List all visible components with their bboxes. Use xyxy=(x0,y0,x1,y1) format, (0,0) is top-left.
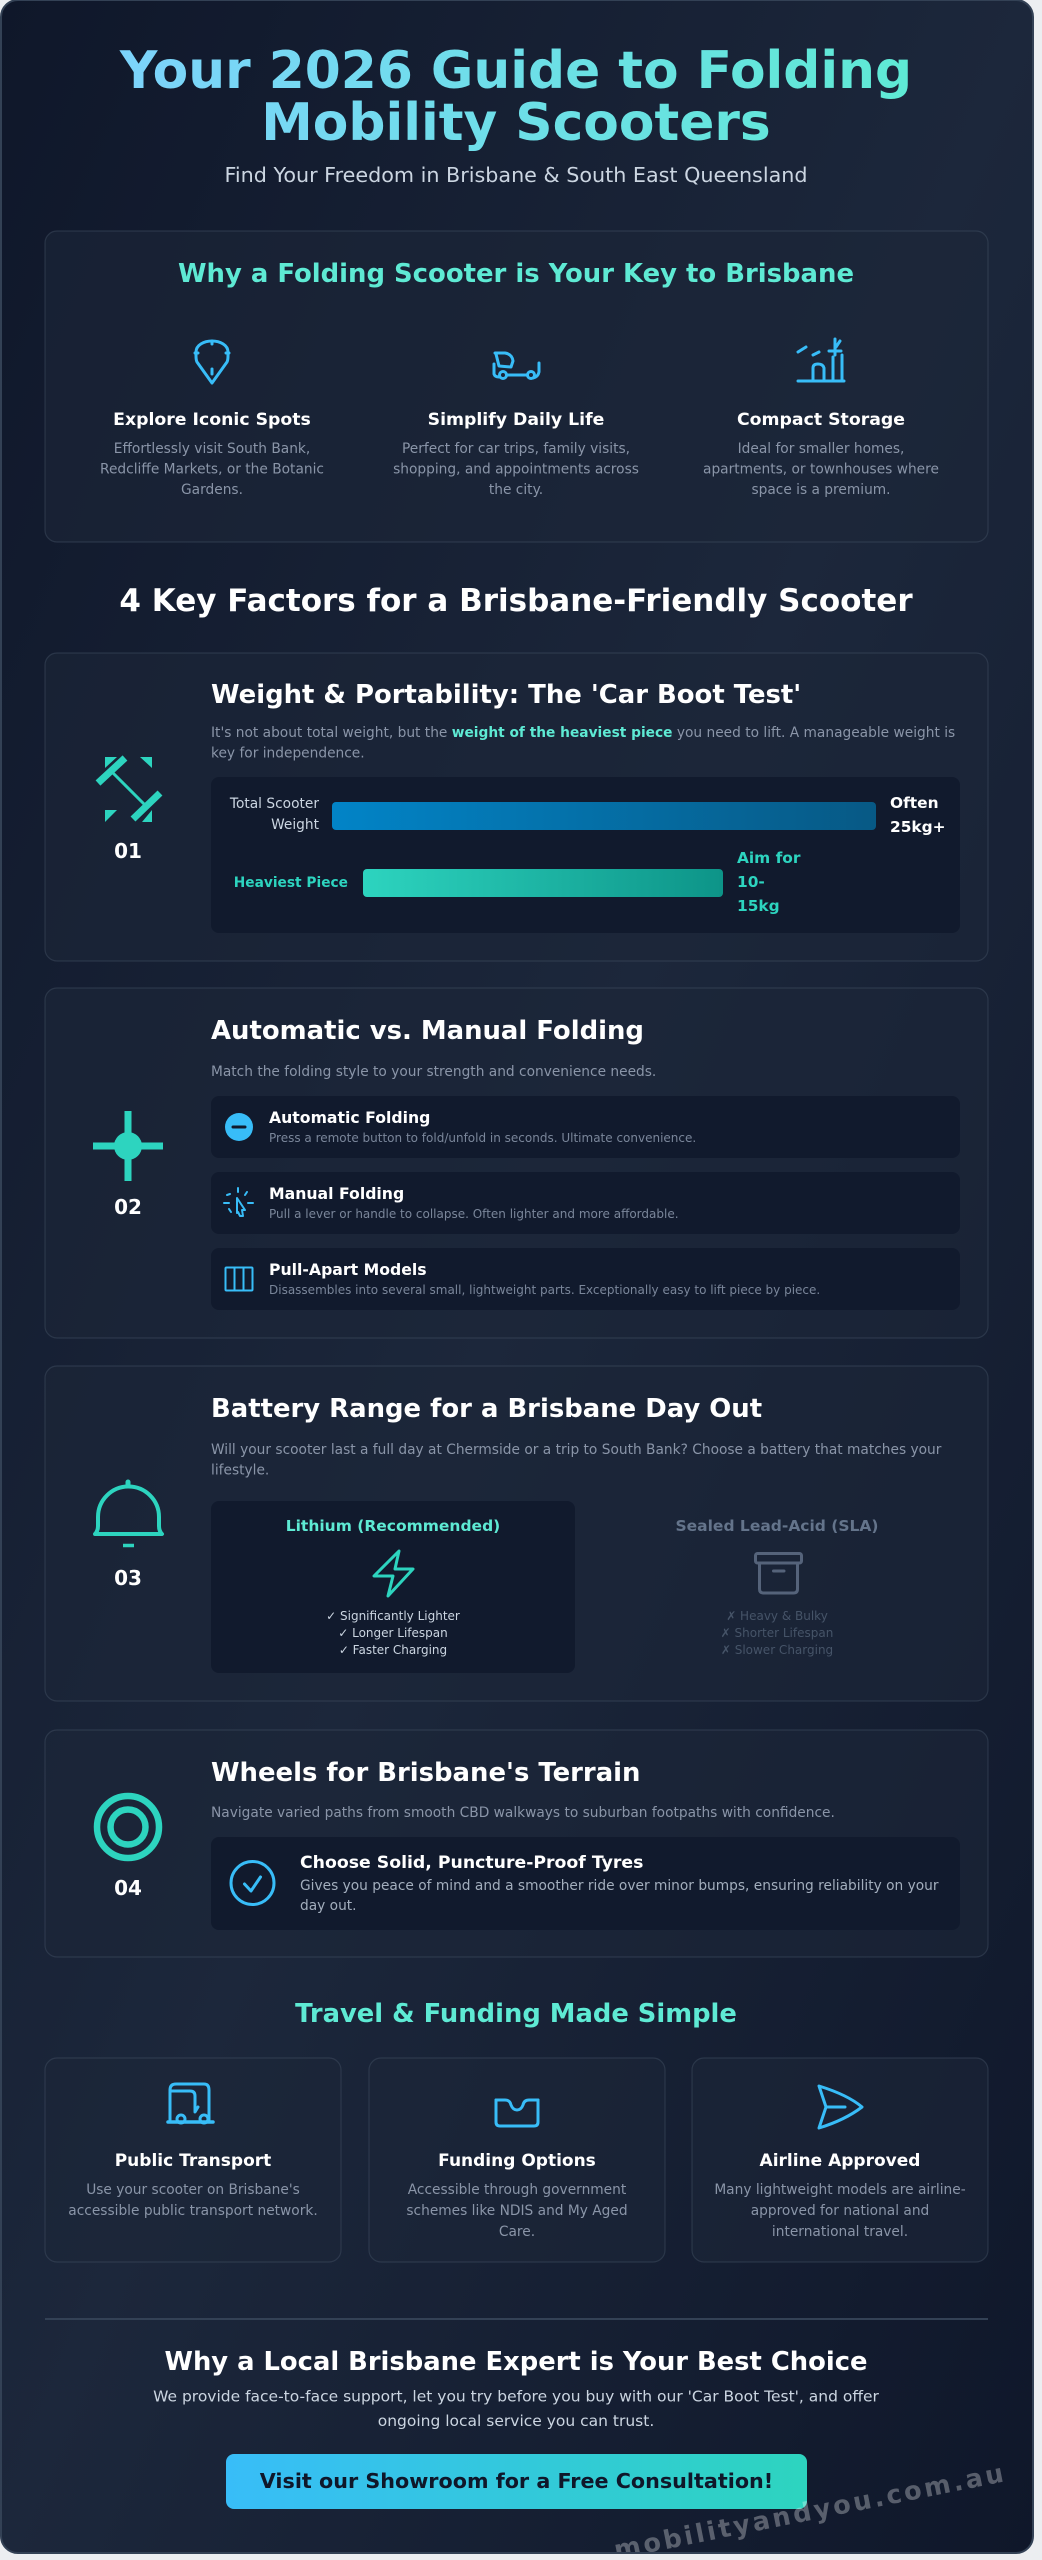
icon: wallet pocket xyxy=(496,2100,538,2126)
panel: funding options xyxy=(369,2058,665,2262)
sealed lead-acid card: ✗ Shorter Lifespan xyxy=(721,1626,833,1640)
icon: check circle xyxy=(231,1862,274,1904)
icon: bell xyxy=(95,1482,162,1546)
panel: public transport: Public Transport xyxy=(115,2151,271,2171)
panel: airline approved: international travel. xyxy=(772,2224,908,2240)
panel: factor 02 folding xyxy=(45,988,988,1338)
factor description: key for independence. xyxy=(211,746,365,762)
factor title: Battery Range for a Brisbane Day Out xyxy=(211,1394,762,1424)
total scooter weight bar xyxy=(229,794,946,836)
feature: compact storage xyxy=(703,339,939,498)
panel: airline approved: Airline Approved xyxy=(760,2151,920,2171)
icon: dumbbell xyxy=(98,757,160,822)
callout: puncture-proof tyres: day out. xyxy=(300,1898,357,1914)
heading: travel and funding: Travel & Funding Made Simple xyxy=(295,1999,737,2029)
feature: compact storage: Ideal for smaller homes, xyxy=(738,441,904,457)
text block: local expert description: ongoing local service you can trust. xyxy=(378,2412,654,2430)
feature: compact storage: apartments, or townhouses where xyxy=(703,462,939,478)
factor description: It's not about total weight, but the weight of the heaviest piece you need to lift. A manageable weight is xyxy=(211,725,955,741)
option: manual folding: Pull a lever or handle to collapse. Often lighter and more affordable. xyxy=(269,1207,679,1221)
sealed lead-acid card: ✗ Slower Charging xyxy=(721,1643,833,1657)
option: manual folding xyxy=(211,1172,960,1234)
factor description xyxy=(211,1442,942,1478)
factor description: Navigate varied paths from smooth CBD walkways to suburban footpaths with confidence. xyxy=(211,1805,835,1821)
panel: public transport: Use your scooter on Brisbane's xyxy=(86,2182,300,2198)
sealed lead-acid card: ✗ Heavy & Bulky xyxy=(726,1609,828,1623)
panel: public transport: accessible public transport network. xyxy=(68,2203,318,2219)
lithium card: ✓ Significantly Lighter xyxy=(326,1609,460,1623)
feature: compact storage: Compact Storage xyxy=(737,410,905,430)
icon: home and tower xyxy=(798,339,844,381)
feature: explore iconic spots xyxy=(100,341,324,498)
option: manual folding: Manual Folding xyxy=(269,1184,404,1203)
total scooter weight bar: Weight xyxy=(271,817,320,833)
icon: bus xyxy=(168,2084,213,2123)
heaviest piece bar: 10- xyxy=(737,873,765,891)
option: automatic folding: Automatic Folding xyxy=(269,1108,430,1127)
title: Your 2026 Guide to Folding xyxy=(119,41,912,101)
icon: archive box xyxy=(756,1554,802,1593)
number 02: 02 xyxy=(114,1195,142,1219)
factor description: Will your scooter last a full day at Chermside or a trip to South Bank? Choose a battery that matches your xyxy=(211,1442,942,1458)
icon: crosshair node xyxy=(93,1111,163,1181)
icon: paper plane xyxy=(819,2086,862,2128)
feature: simplify daily life: Perfect for car trips, family visits, xyxy=(402,441,630,457)
panel: why a folding scooter xyxy=(45,231,988,542)
lithium card: Lithium (Recommended) xyxy=(286,1517,500,1535)
section heading: why: Why a Folding Scooter is Your Key to Brisbane xyxy=(178,259,854,289)
factor title: Wheels for Brisbane's Terrain xyxy=(211,1758,640,1788)
icon: lightning bolt xyxy=(374,1551,413,1596)
number 04: 04 xyxy=(114,1876,142,1900)
total scooter weight bar: Total Scooter xyxy=(229,796,319,812)
option: pull-apart models: Pull-Apart Models xyxy=(269,1260,427,1279)
call-to-action button: Visit our Showroom for a Free Consultation! xyxy=(260,2469,773,2493)
option: automatic folding: Press a remote button to fold/unfold in seconds. Ultimate convenience. xyxy=(269,1131,696,1145)
factor title: Weight & Portability: The 'Car Boot Test' xyxy=(211,680,801,710)
panel: airline approved xyxy=(692,2058,988,2262)
panel: factor 03 battery xyxy=(45,1366,988,1701)
feature: simplify daily life: Simplify Daily Life xyxy=(428,410,604,430)
lithium card: ✓ Longer Lifespan xyxy=(338,1626,448,1640)
icon: map pin xyxy=(195,341,229,383)
option: pull-apart models xyxy=(211,1248,960,1310)
title: Mobility Scooters xyxy=(261,93,771,153)
heaviest piece bar xyxy=(234,849,801,915)
icon: minus circle xyxy=(225,1113,253,1141)
heading: 4 key factors: 4 Key Factors for a Brisbane-Friendly Scooter xyxy=(119,583,913,619)
icon: wheel rings xyxy=(97,1796,159,1858)
panel: airline approved: Many lightweight models are airline- xyxy=(714,2182,966,2198)
panel: funding options: Accessible through government xyxy=(408,2182,627,2198)
panel: factor 01 weight and portability xyxy=(45,653,988,961)
total scooter weight bar: Often xyxy=(890,794,939,812)
panel: airline approved: approved for national and xyxy=(751,2203,929,2219)
factor description: Match the folding style to your strength and convenience needs. xyxy=(211,1064,656,1080)
text block: local expert description: We provide face-to-face support, let you try before you buy with our 'Car Boot Test', and offer xyxy=(153,2388,880,2406)
sealed lead-acid card xyxy=(675,1517,879,1657)
feature: explore iconic spots: Explore Iconic Spots xyxy=(113,410,311,430)
factor title: Automatic vs. Manual Folding xyxy=(211,1016,644,1046)
text block: local expert description xyxy=(153,2388,880,2430)
feature: explore iconic spots: Gardens. xyxy=(181,482,243,498)
lithium card: ✓ Faster Charging xyxy=(339,1643,447,1657)
panel: funding options: Care. xyxy=(499,2224,535,2240)
icon: columns xyxy=(226,1268,252,1290)
heaviest piece bar: Aim for xyxy=(737,849,801,867)
title xyxy=(119,41,912,153)
subtitle: Find Your Freedom in Brisbane & South East Queensland xyxy=(224,163,808,187)
option: pull-apart models: Disassembles into several small, lightweight parts. Exceptionally easy to lift piece by piece. xyxy=(269,1283,820,1297)
bar chart: weight comparison xyxy=(211,777,960,933)
heaviest piece bar: 15kg xyxy=(737,897,780,915)
panel: funding options: schemes like NDIS and My Aged xyxy=(406,2203,628,2219)
call-to-action button xyxy=(226,2454,807,2509)
icon: small scooter xyxy=(494,353,539,378)
feature: compact storage: space is a premium. xyxy=(751,482,891,498)
feature: explore iconic spots: Effortlessly visit South Bank, xyxy=(114,441,310,457)
heading: local expert: Why a Local Brisbane Expert is Your Best Choice xyxy=(164,2347,868,2377)
icon: cursor click xyxy=(224,1188,253,1216)
panel: funding options: Funding Options xyxy=(438,2151,596,2171)
feature: simplify daily life: the city. xyxy=(489,482,543,498)
number 03: 03 xyxy=(114,1566,142,1590)
callout: puncture-proof tyres: Gives you peace of mind and a smoother ride over minor bumps, ensuring reliability on your xyxy=(300,1878,939,1894)
feature: simplify daily life: shopping, and appointments across xyxy=(393,462,639,478)
feature: simplify daily life xyxy=(393,353,639,498)
panel: factor 04 wheels xyxy=(45,1730,988,1957)
panel: public transport xyxy=(45,2058,341,2262)
factor description: lifestyle. xyxy=(211,1462,269,1478)
callout: puncture-proof tyres xyxy=(211,1837,960,1930)
factor description xyxy=(211,725,955,762)
total scooter weight bar: 25kg+ xyxy=(890,818,946,836)
feature: explore iconic spots: Redcliffe Markets, or the Botanic xyxy=(100,462,324,478)
number 01: 01 xyxy=(114,839,142,863)
heaviest piece bar: Heaviest Piece xyxy=(234,875,348,891)
callout: puncture-proof tyres: Choose Solid, Puncture-Proof Tyres xyxy=(300,1853,643,1873)
sealed lead-acid card: Sealed Lead-Acid (SLA) xyxy=(675,1517,879,1535)
lithium card xyxy=(211,1501,575,1673)
option: automatic folding xyxy=(211,1096,960,1158)
